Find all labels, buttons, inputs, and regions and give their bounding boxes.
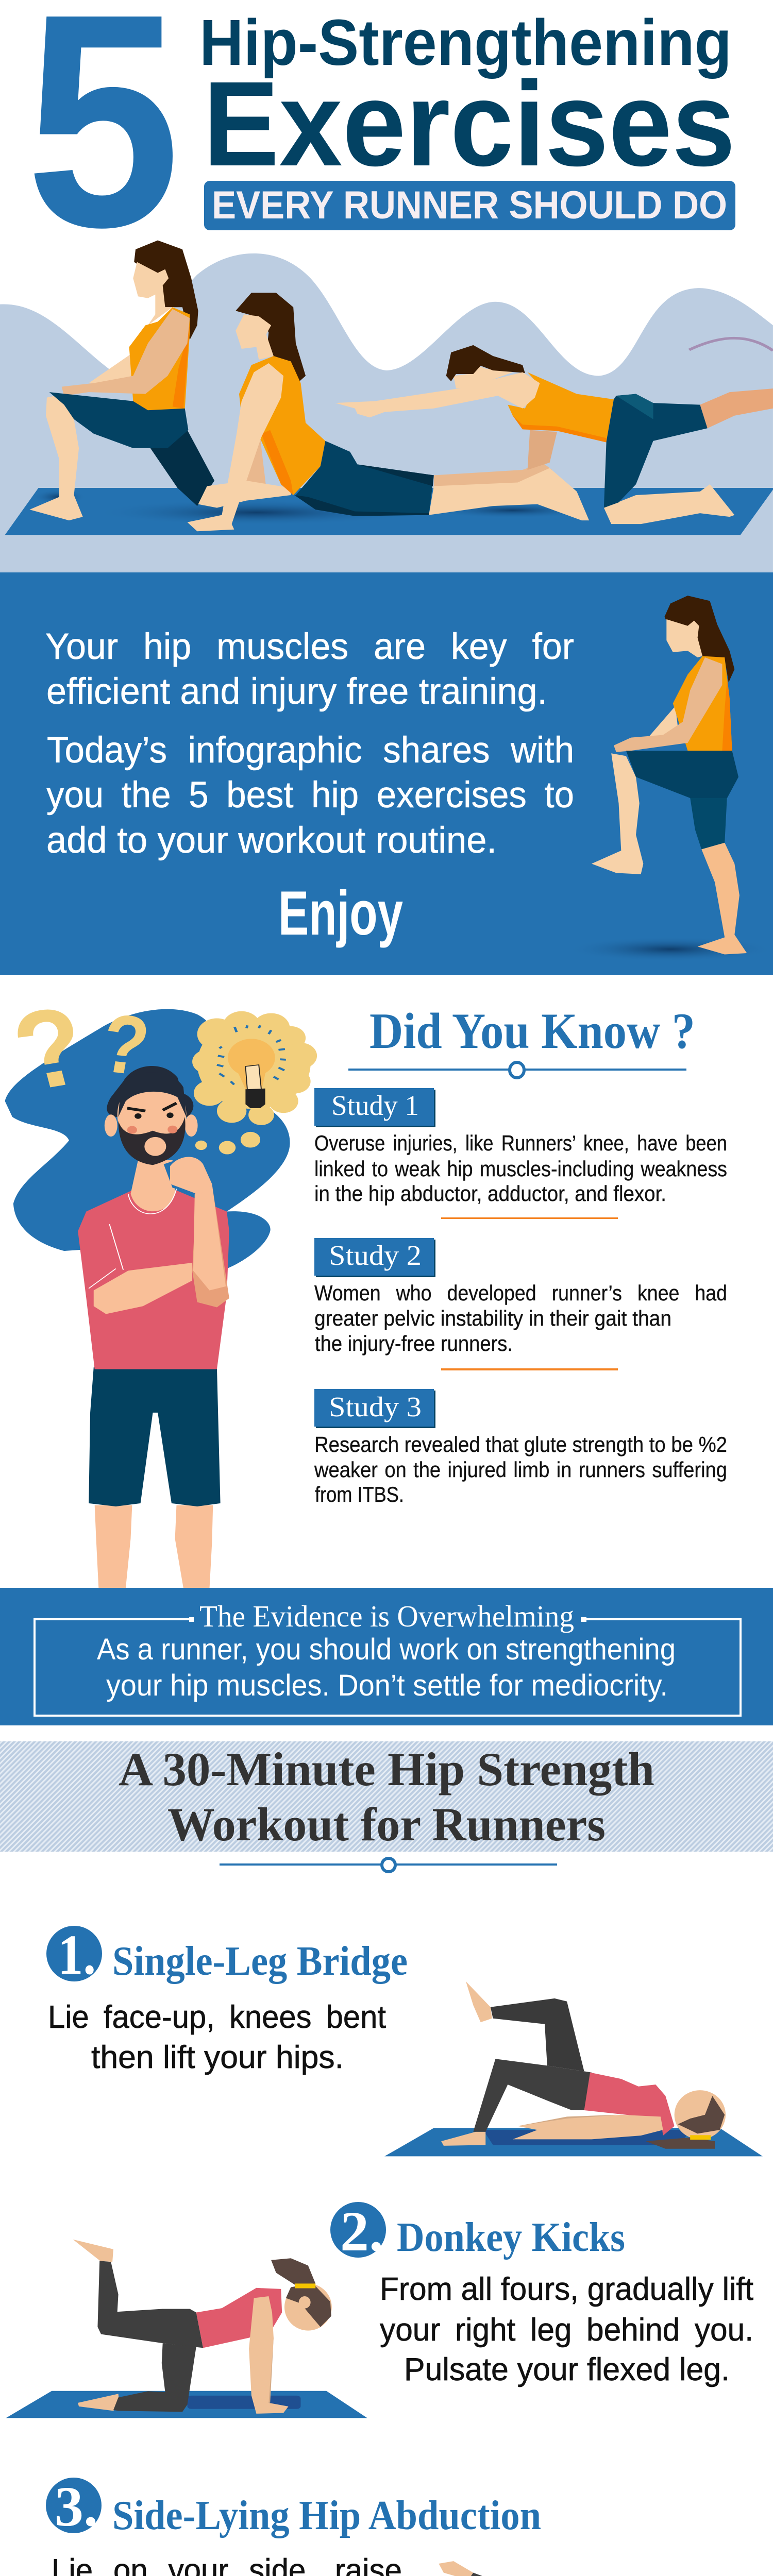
woman cobra	[188, 293, 589, 531]
study 3 label	[314, 1389, 435, 1428]
hero panel: hills, mat and three stretching women	[0, 240, 773, 572]
study 2 text: Women who developed runner’s knee had	[314, 1281, 727, 1305]
study 3	[314, 1389, 727, 1506]
title: 5 Hip-Strengthening Exercises	[26, 0, 735, 291]
subtitle pill: EVERY RUNNER SHOULD DO	[212, 183, 727, 227]
number badge 2: 2.	[340, 2200, 383, 2263]
heading line: Hip-Strengthening: Hip-Strengthening	[199, 6, 732, 79]
evidence text: As a runner, you should work on strengthening	[97, 1633, 676, 1666]
evidence text: your hip muscles. Don’t settle for mediocrity.	[106, 1669, 668, 1702]
number badge 1: 1.	[58, 1923, 96, 1986]
intro paragraph 1: Your hip muscles are key for	[45, 626, 574, 667]
Enjoy: Enjoy	[278, 878, 403, 948]
workout heading band: A 30-Minute Hip Strength	[119, 1743, 654, 1795]
workout heading band: Workout for Runners	[167, 1798, 606, 1851]
heading line: Exercises: Exercises	[203, 56, 735, 191]
intro paragraph 2: Today’s infographic shares with	[47, 730, 574, 771]
yoga mat	[5, 488, 773, 535]
study 2 text: greater pelvic instability in their gait than	[314, 1306, 671, 1330]
woman standing knee raise	[567, 596, 773, 962]
mat shadows	[32, 489, 596, 526]
hills background	[0, 253, 773, 572]
evidence text	[97, 1633, 676, 1702]
exercise 1: Single-Leg Bridge	[46, 1923, 763, 2156]
man figure	[78, 1066, 229, 1588]
exercise 2 text: your right leg behind you.	[380, 2312, 753, 2348]
study 1	[314, 1088, 727, 1206]
exercise 3 title: Side-Lying Hip Abduction	[112, 2493, 541, 2538]
woman kneeling	[29, 240, 214, 520]
heading divider	[348, 1062, 686, 1078]
workout divider	[220, 1858, 557, 1872]
study 3 text	[314, 1432, 727, 1506]
study 3 text: weaker on the injured limb in runners suffering	[314, 1458, 727, 1482]
intro panel	[0, 572, 773, 975]
study 1 text	[314, 1131, 727, 1206]
figure: donkey kick	[6, 2240, 367, 2418]
exercise 1 text	[48, 1999, 386, 2075]
study 3 text: Research revealed that glute strength to be %2	[314, 1432, 727, 1456]
study 1 label: Study 1	[331, 1090, 419, 1121]
exercise 2 text: From all fours, gradually lift	[380, 2272, 753, 2307]
exercise 2: Donkey Kicks	[6, 2200, 753, 2418]
exercise 2 text: Pulsate your flexed leg.	[404, 2352, 730, 2387]
exercise 2 text	[380, 2272, 753, 2387]
exercise 1 text: Lie face-up, knees bent	[48, 1999, 386, 2035]
study 1 text: linked to weak hip muscles-including weakness	[314, 1157, 727, 1181]
study 2	[314, 1238, 727, 1355]
did you know heading	[348, 1003, 695, 1078]
exercise 3: Side-Lying Hip Abduction	[46, 2475, 759, 2576]
evidence frame	[35, 1617, 741, 1716]
blue blob	[5, 1009, 290, 1268]
study 1 label	[314, 1088, 435, 1127]
did you know heading: Did You Know ?	[369, 1003, 695, 1059]
intro paragraph 1: efficient and injury free training.	[46, 671, 547, 712]
evidence panel	[0, 1588, 773, 1725]
intro paragraph 2: you the 5 best hip exercises to	[46, 775, 574, 816]
did you know illustration: thinking man	[1, 982, 317, 1588]
figure: side-lying abduction	[384, 2561, 759, 2576]
intro paragraph 1	[45, 626, 574, 712]
study 2 label	[314, 1238, 435, 1277]
question marks: ?	[1, 982, 99, 1114]
figure: single-leg bridge	[384, 1981, 763, 2156]
light bulb thought cloud	[192, 1011, 317, 1155]
intro paragraph 2	[46, 730, 574, 861]
exercise 1 title: Single-Leg Bridge	[112, 1939, 408, 1984]
question marks: ?	[94, 996, 156, 1093]
study 3 text: from ITBS.	[315, 1482, 404, 1506]
study 2 text: the injury-free runners.	[315, 1331, 513, 1355]
study 2 text	[314, 1281, 727, 1355]
study 3 label: Study 3	[329, 1391, 422, 1422]
question marks	[1, 982, 156, 1114]
intro paragraph 2: add to your workout routine.	[46, 820, 497, 861]
exercise 1 text: then lift your hips.	[91, 2040, 344, 2075]
workout heading band	[0, 1741, 773, 1852]
evidence heading: The Evidence is Overwhelming	[199, 1599, 574, 1633]
study 1 text: in the hip abductor, adductor, and flexor.	[314, 1181, 666, 1206]
number badge 3: 3.	[55, 2475, 98, 2538]
woman bird dog	[335, 338, 773, 524]
exercise 2 title: Donkey Kicks	[397, 2215, 625, 2260]
study 2 label: Study 2	[329, 1240, 422, 1271]
